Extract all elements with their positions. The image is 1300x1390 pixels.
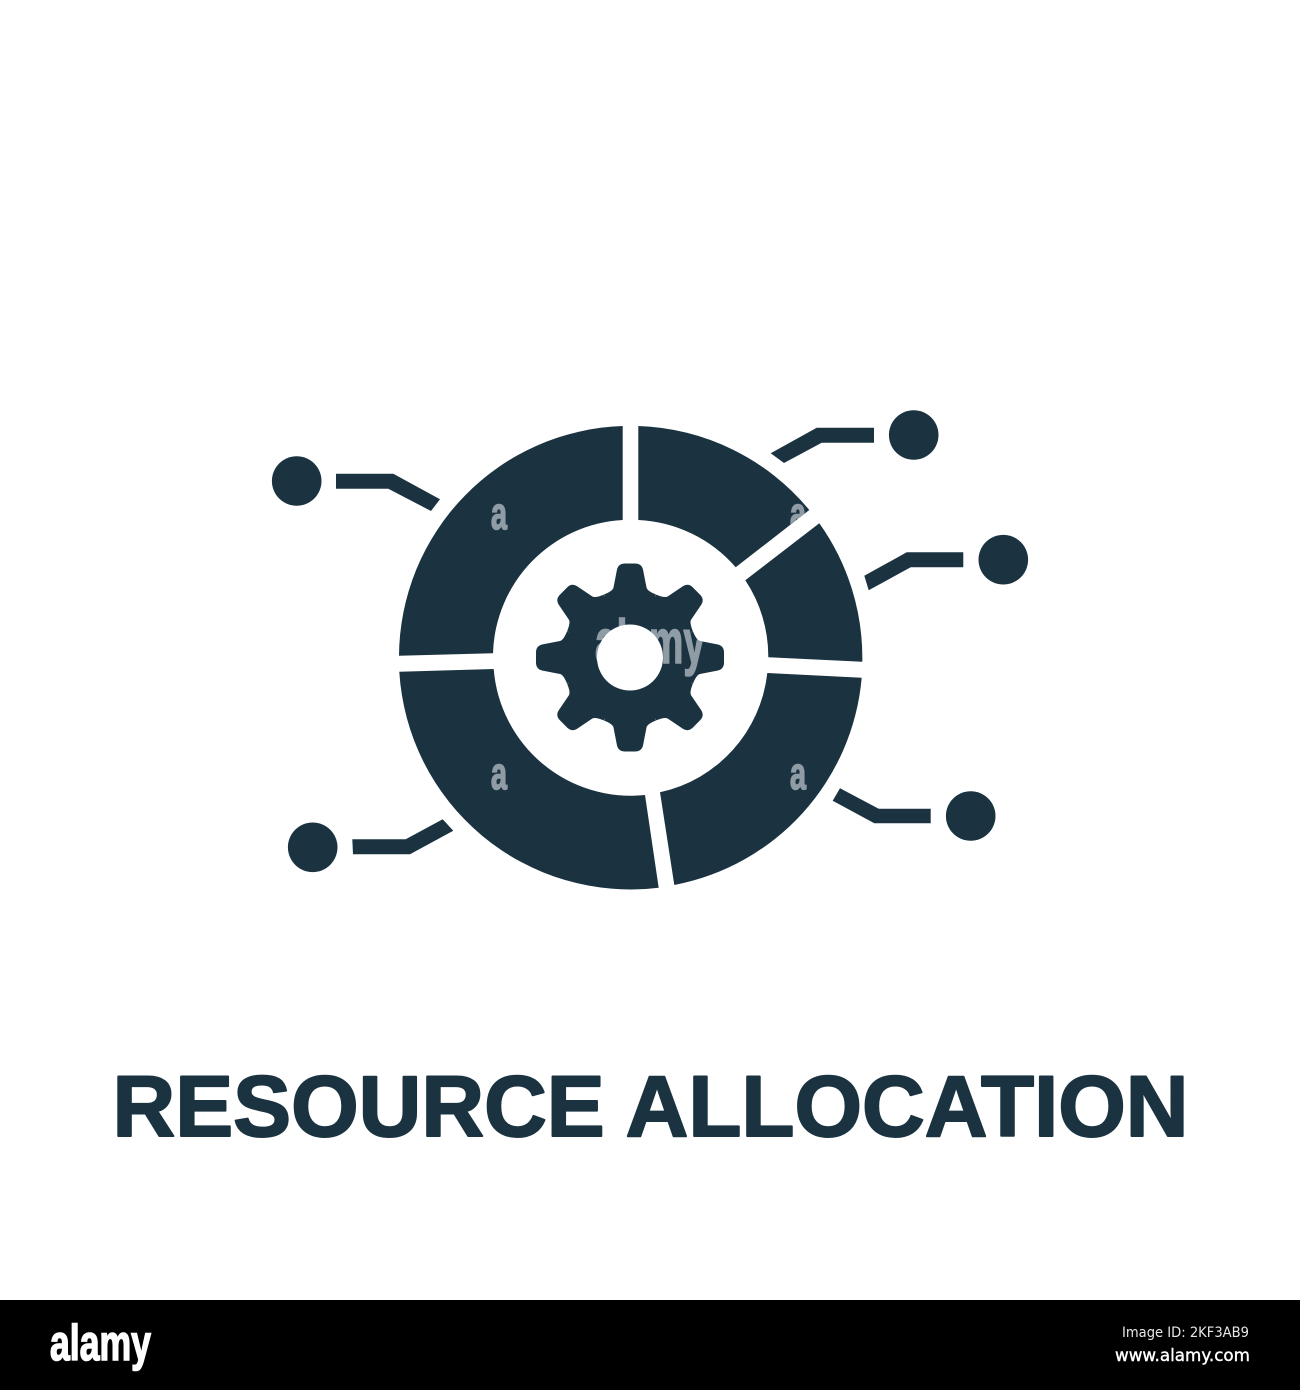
segment: bottom right (660, 673, 862, 885)
connector: middle right (864, 535, 1028, 590)
watermark marks (491, 488, 807, 799)
icon: resource allocation donut chart with gear (272, 410, 1028, 889)
segment: right (745, 523, 862, 662)
segment: top right (638, 426, 809, 567)
title: RESOURCE ALLOCATION (112, 1059, 1188, 1155)
connector: bottom left (288, 819, 453, 872)
footer logo: alamy (50, 1315, 151, 1371)
connector: bottom right (833, 788, 996, 841)
watermark marks: a (790, 748, 807, 799)
gear hole (597, 624, 663, 690)
watermark marks: a (491, 748, 508, 799)
donut chart (399, 426, 862, 889)
watermark marks: a (491, 488, 508, 539)
segment: top left (399, 426, 623, 656)
website: www.alamy.com (1115, 1346, 1250, 1366)
watermark marks: a (790, 488, 807, 539)
watermark marks: alamy (595, 608, 705, 677)
connector: top left (272, 456, 440, 511)
footer bar (0, 1300, 1300, 1390)
connector: top right (771, 410, 938, 463)
image id: Image ID: 2KF3AB9 (1122, 1325, 1249, 1341)
segment: bottom left (399, 669, 659, 889)
icon: gear (536, 564, 724, 752)
